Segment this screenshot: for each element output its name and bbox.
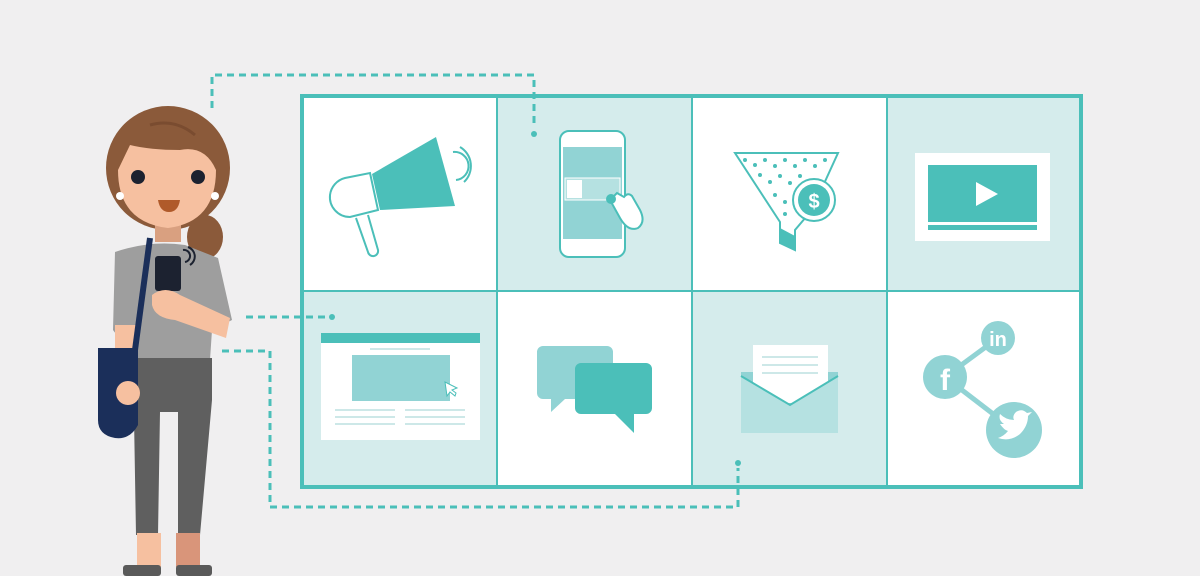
icon: sales funnel: $ bbox=[808, 191, 820, 213]
icon: chat bubbles bbox=[537, 346, 652, 433]
icon: social network: in bbox=[989, 329, 1007, 351]
icon: smartphone bbox=[560, 131, 643, 257]
arrow: dashed connector top bbox=[212, 75, 537, 137]
panel: grid bbox=[300, 94, 1083, 489]
icon: sales funnel bbox=[735, 153, 838, 250]
icon: video player bbox=[915, 153, 1050, 241]
icon: social network bbox=[923, 321, 1042, 458]
arrow: dashed connector bottom bbox=[222, 351, 741, 507]
figure: woman with phone bbox=[98, 106, 232, 576]
icon: megaphone bbox=[330, 137, 471, 256]
icon: social network: f bbox=[940, 364, 951, 397]
icon: web page bbox=[321, 333, 480, 440]
icon: envelope bbox=[741, 345, 838, 433]
arrow: dashed connector middle bbox=[246, 314, 335, 320]
